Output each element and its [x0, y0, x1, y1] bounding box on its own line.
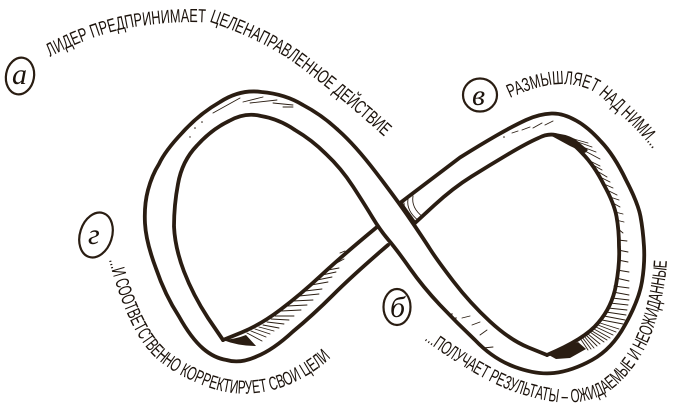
label b: ...ПОЛУЧАЕТ РЕЗУЛЬТАТЫ – ОЖИДАЕМЫЕ И НЕОЖИДАННЫЕ	[425, 260, 667, 402]
badge a: а	[12, 58, 27, 91]
label g: ...И СООТВЕТСТВЕННО КОРРЕКТИРУЕТ СВОИ ЦЕЛИ	[109, 260, 330, 394]
band: infinity outline	[145, 91, 644, 373]
shading: lower left corner hatching	[223, 246, 354, 346]
callout: step b	[382, 260, 667, 402]
label a: ЛИДЕР ПРЕДПРИНИМАЕТ ЦЕЛЕНАПРАВЛЕННОЕ ДЕЙСТВИЕ	[46, 9, 392, 136]
badge v	[463, 78, 497, 112]
badge g	[74, 208, 118, 262]
badge v: в	[472, 79, 485, 112]
callout: step a	[4, 9, 392, 136]
callout: step v	[462, 70, 656, 148]
shading: top of left loop	[189, 97, 293, 138]
shading: top of right loop band	[503, 121, 553, 138]
badge g: г	[88, 218, 100, 251]
label v: РАЗМЫШЛЯЕТ НАД НИМИ...	[506, 70, 656, 148]
badge b: б	[390, 291, 406, 324]
badge b	[384, 289, 410, 325]
shading: lower right band start	[451, 313, 493, 348]
shading: right loop upper corner	[548, 134, 624, 233]
shading: right loop lower hatching	[547, 240, 629, 359]
shading: band end at crossing	[400, 196, 423, 224]
callout: step g	[78, 211, 330, 394]
badge a	[3, 55, 37, 97]
